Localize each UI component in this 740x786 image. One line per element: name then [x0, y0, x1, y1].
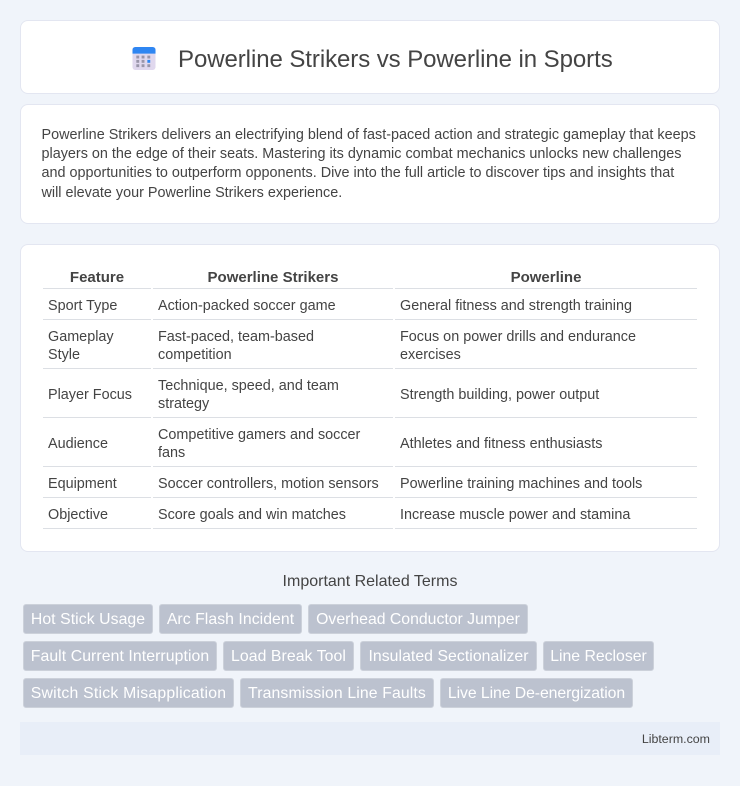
table rows: strategy — [158, 396, 209, 412]
table rows: Increase muscle power and stamina — [400, 507, 630, 523]
table rows: Equipment — [48, 476, 117, 492]
table header row: Powerline — [511, 269, 581, 286]
table rows — [43, 298, 697, 529]
heading: important related terms: Important Related Terms — [283, 573, 457, 590]
table rows: Player Focus — [48, 387, 132, 403]
related terms tags: Hot Stick Usage — [31, 611, 145, 628]
table rows: Style — [48, 347, 80, 363]
footer credit: Libterm.com — [642, 732, 710, 746]
related terms tags: Line Recloser — [550, 648, 647, 665]
related terms tags: Load Break Tool — [231, 648, 346, 665]
table rows: Fast-paced, team-based — [158, 329, 314, 345]
related terms tags: Switch Stick Misapplication — [31, 685, 226, 702]
comparison table — [43, 269, 697, 529]
panel: title header — [20, 20, 720, 94]
related terms tags: Transmission Line Faults — [248, 685, 426, 702]
table rows: Soccer controllers, motion sensors — [158, 476, 379, 492]
table rows: Sport Type — [48, 298, 117, 314]
table rows: Technique, speed, and team — [158, 378, 339, 394]
related terms tags: Arc Flash Incident — [167, 611, 294, 628]
related terms tags: Insulated Sectionalizer — [368, 648, 529, 665]
text block: introduction: will elevate your Powerline Strikers experience. — [42, 185, 342, 201]
text block: introduction: Powerline Strikers delivers an electrifying blend of fast-paced action and strategic gameplay that keeps — [42, 127, 696, 143]
text block: introduction — [42, 127, 696, 201]
table rows: General fitness and strength training — [400, 298, 632, 314]
icon: calendar — [132, 47, 156, 70]
related terms tags: Overhead Conductor Jumper — [316, 611, 520, 628]
text block: introduction: and opportunities to outperform opponents. Dive into the full article to discover tips and insights that — [42, 165, 674, 181]
table header row — [43, 269, 697, 289]
related terms tags: Fault Current Interruption — [31, 648, 209, 665]
table rows: Strength building, power output — [400, 387, 599, 403]
related terms tags — [23, 604, 654, 708]
table rows: Competitive gamers and soccer — [158, 427, 360, 443]
table rows: Score goals and win matches — [158, 507, 346, 523]
table rows: Gameplay — [48, 329, 114, 345]
table rows: exercises — [400, 347, 461, 363]
table rows: Focus on power drills and endurance — [400, 329, 636, 345]
table rows: Powerline training machines and tools — [400, 476, 642, 492]
panel: comparison table — [20, 244, 720, 552]
text block: introduction: players on the edge of their seats. Mastering its dynamic combat mechanics unlocks new challenges — [42, 146, 681, 162]
title: Powerline Strikers vs Powerline in Sports — [178, 46, 613, 73]
table rows: Audience — [48, 436, 108, 452]
panel: introduction — [20, 104, 720, 224]
table rows: Action-packed soccer game — [158, 298, 336, 314]
footer bar — [20, 722, 720, 755]
table header row: Powerline Strikers — [208, 269, 338, 286]
related terms tags: Live Line De-energization — [448, 685, 625, 702]
table rows: fans — [158, 445, 185, 461]
table rows: Athletes and fitness enthusiasts — [400, 436, 602, 452]
table header row: Feature — [70, 269, 124, 286]
table rows: competition — [158, 347, 232, 363]
table rows: Objective — [48, 507, 108, 523]
